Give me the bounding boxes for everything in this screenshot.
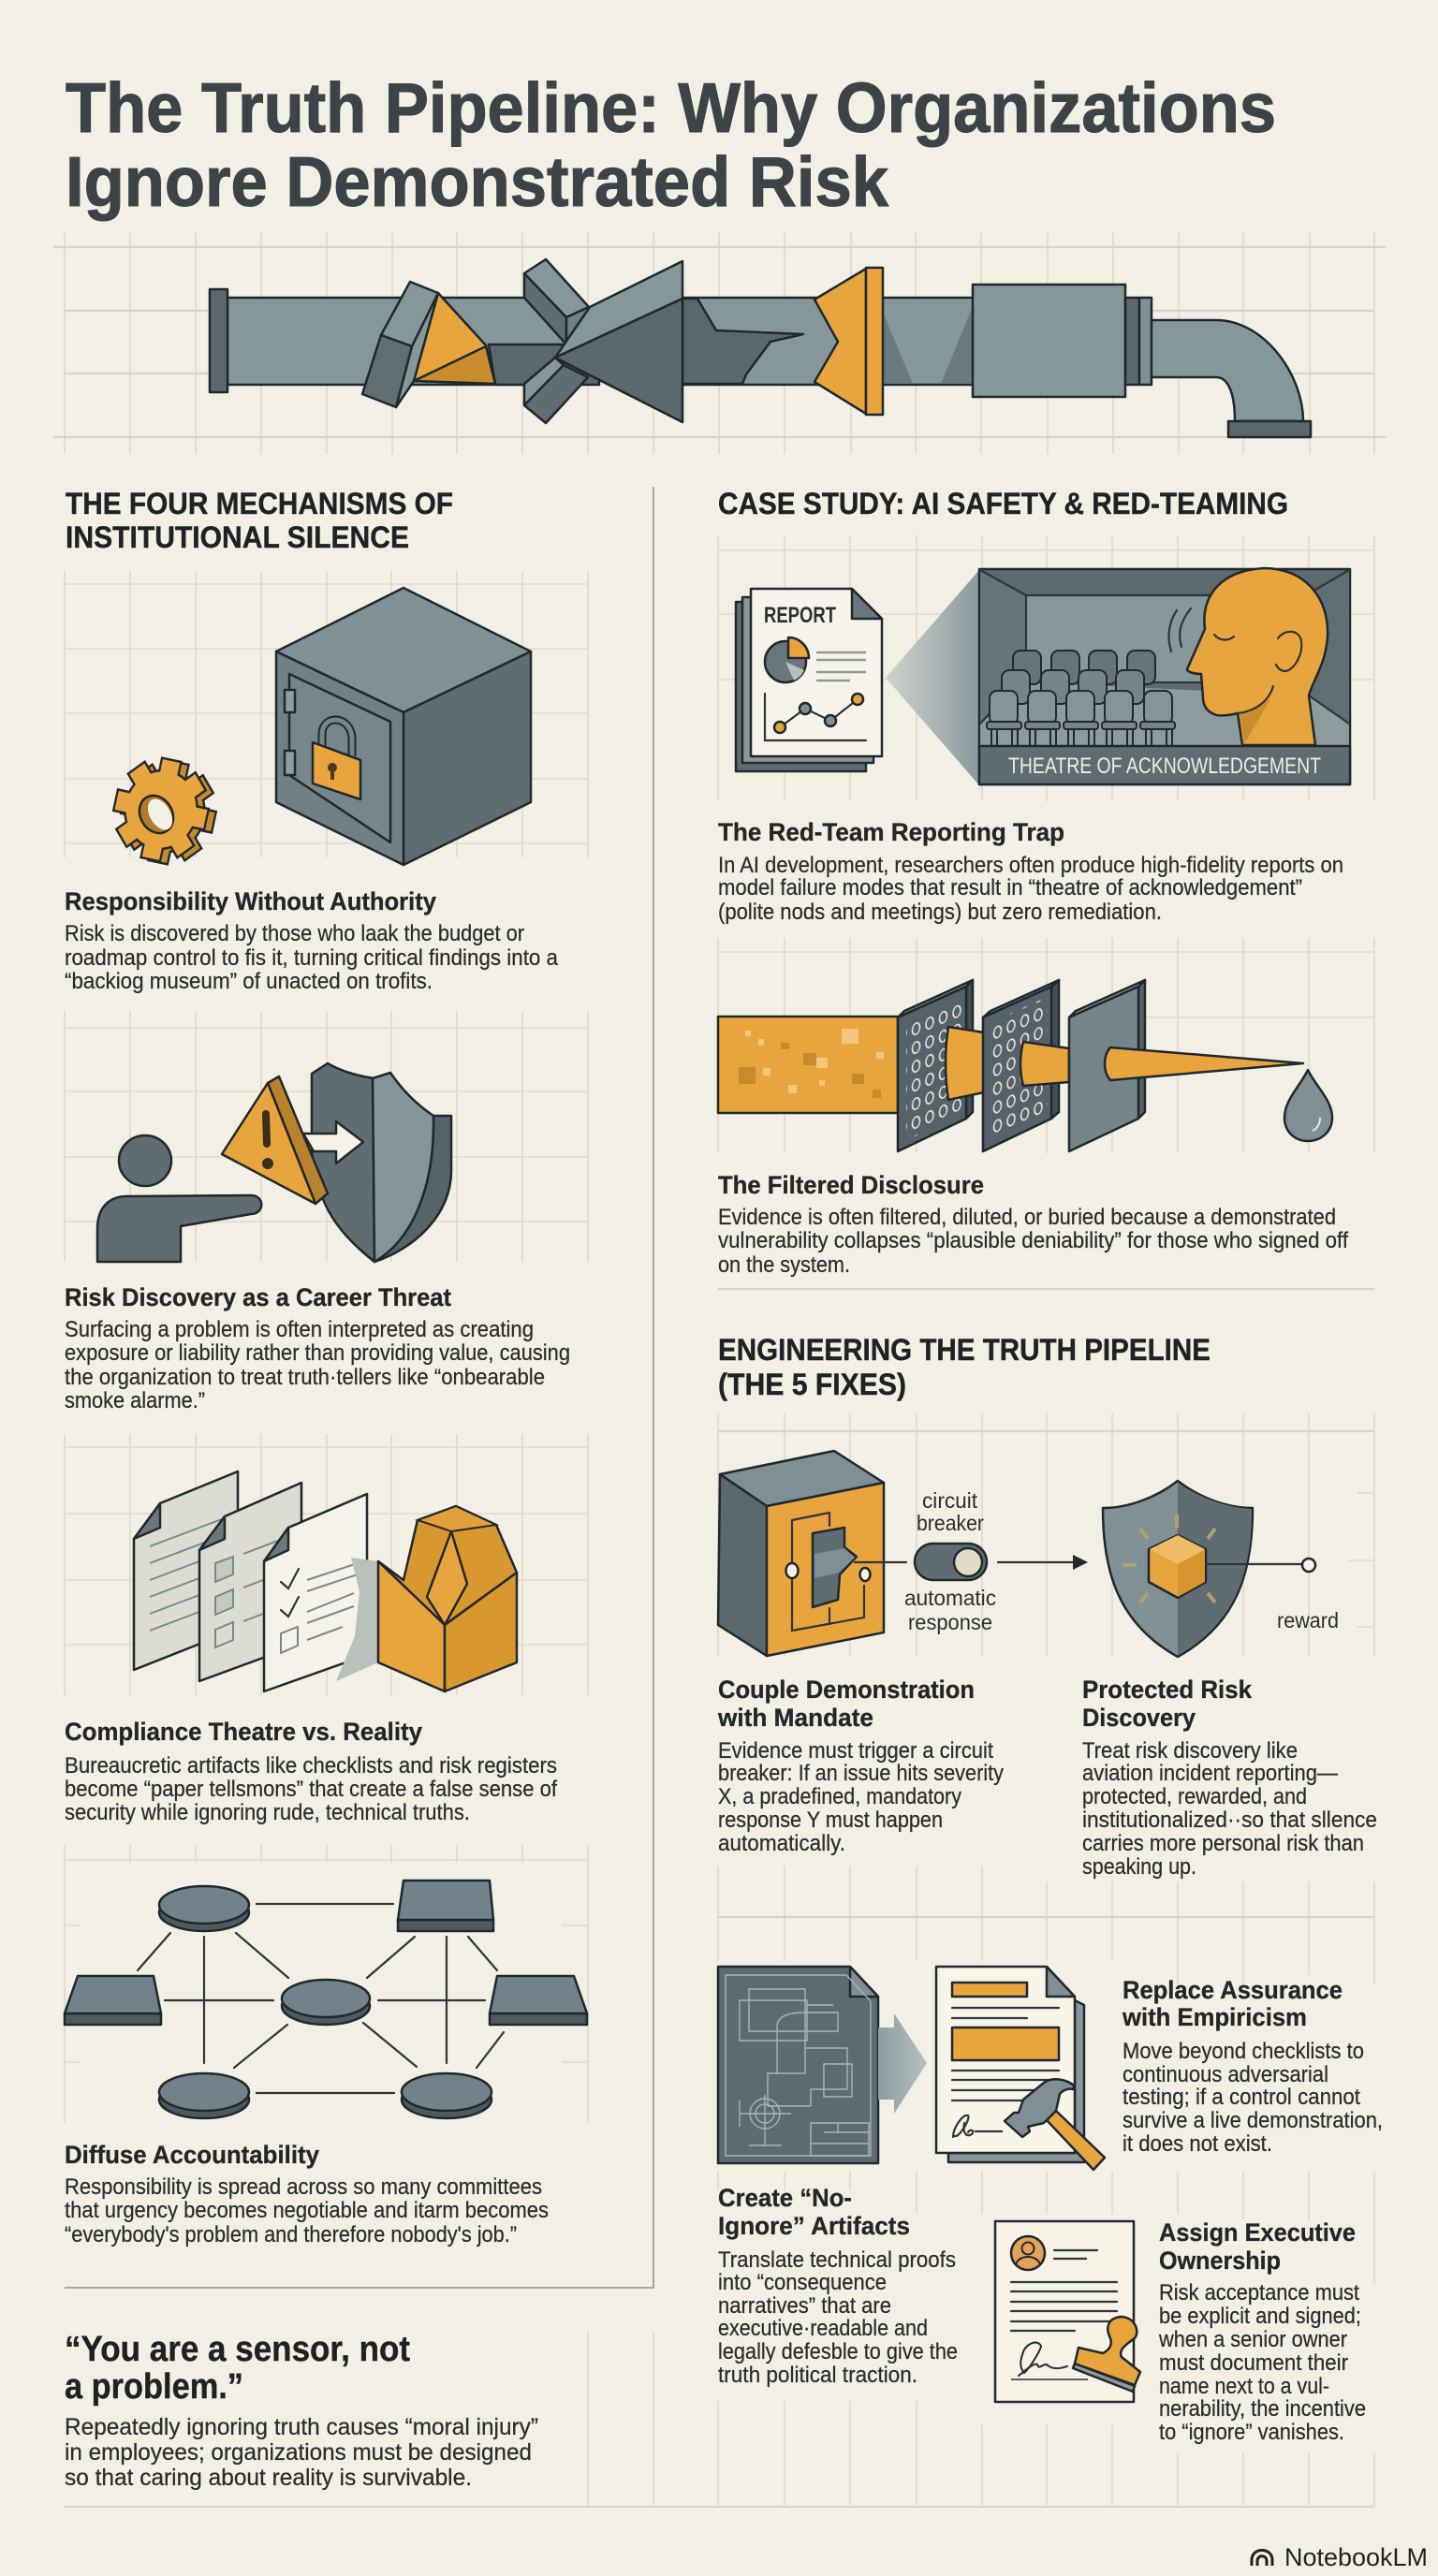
footer: NotebookLM logo	[1252, 2543, 1428, 2571]
pipe break: dark inner section	[489, 344, 599, 385]
icon: locked safe	[276, 588, 531, 865]
icon: report stack	[736, 589, 882, 771]
outlet foot	[1228, 421, 1311, 437]
text: the filtered disclosure: Evidence is often filtered, diluted, or buried because a demonstrated	[718, 1205, 1336, 1230]
rubber stamp	[1073, 2317, 1140, 2392]
pull quote: so that caring about reality is survivable.	[65, 2465, 472, 2491]
text: protected risk discovery: aviation incident reporting—	[1082, 1761, 1338, 1786]
filter: solid panel	[1069, 980, 1145, 1151]
text: diffuse accountability	[65, 2141, 549, 2247]
illustration: broken truth pipeline	[210, 259, 1311, 437]
room frame and ceiling	[979, 569, 1350, 784]
label: automatic response	[904, 1586, 996, 1634]
text lines	[816, 652, 866, 681]
text: compliance theatre vs reality: become “paper tellsmons” that create a false sense of	[65, 1777, 557, 1802]
seats	[987, 651, 1175, 745]
icon: circuit breaker box	[718, 1451, 884, 1656]
text: assign executive ownership	[1158, 2218, 1366, 2445]
text: responsibility without authority: Responsibility Without Authority	[65, 887, 436, 915]
text: create no-ignore artifacts: into “consequence	[718, 2270, 887, 2295]
title	[66, 68, 1276, 221]
text: replace assurance with empiricism: testing; if a control cannot	[1123, 2085, 1360, 2110]
label: circuit breaker: circuit	[922, 1488, 978, 1513]
text: replace assurance with empiricism: it does not exist.	[1123, 2131, 1272, 2157]
node: top left	[159, 1886, 249, 1931]
orange head	[1187, 568, 1328, 745]
floor	[980, 682, 1349, 746]
text: risk discovery as a career threat: the organization to treat truth·tellers like “onbearable	[65, 1365, 545, 1390]
paper: report	[134, 1471, 238, 1670]
orange valve	[814, 268, 883, 415]
text: create no-ignore artifacts: Translate technical proofs	[718, 2247, 956, 2273]
illustration: filtered disclosure	[718, 980, 1332, 1151]
text: assign executive ownership: when a senior owner	[1158, 2327, 1347, 2352]
icon: document with hammer	[936, 1967, 1105, 2170]
icon: signed document with stamp	[995, 2221, 1140, 2402]
pull quote: in employees; organizations must be designed	[65, 2439, 532, 2466]
illustration: theatre of acknowledgement	[979, 568, 1350, 784]
label: circuit breaker: breaker	[917, 1511, 984, 1535]
pipe shard: lower left	[362, 335, 412, 407]
torn shadow	[336, 1558, 378, 1681]
node: right	[490, 1976, 587, 2025]
light rays	[1123, 1515, 1215, 1603]
text: diffuse accountability: Diffuse Accountability	[65, 2141, 319, 2169]
text: risk discovery as a career threat: exposure or liability rather than providing value, causing	[65, 1340, 570, 1366]
text: create no-ignore artifacts: executive·readable and	[718, 2316, 928, 2341]
left wall	[980, 570, 1026, 724]
icon: orange gear	[107, 752, 223, 871]
heading: engineering the truth pipeline	[718, 1333, 1211, 1401]
icon: protected shield with cube	[1103, 1481, 1253, 1657]
safe door	[289, 674, 390, 842]
hammer	[1005, 2079, 1105, 2170]
text: couple demonstration with mandate: X, a pradefined, mandatory	[718, 1784, 961, 1809]
droplet	[1284, 1070, 1332, 1141]
padlock	[313, 720, 360, 799]
shield right edge	[374, 1116, 451, 1262]
heading: four mechanisms	[66, 487, 453, 554]
text: risk discovery as a career threat: Surfacing a problem is often interpreted as creating	[65, 1317, 534, 1342]
text: assign executive ownership: Risk acceptance must	[1159, 2280, 1359, 2305]
text: assign executive ownership: to “ignore” vanishes.	[1159, 2420, 1344, 2445]
safe right side	[404, 651, 531, 865]
connectors	[138, 1904, 504, 2093]
icon: notebooklm arcs	[1252, 2550, 1272, 2566]
column divider	[65, 487, 653, 2288]
shield back	[312, 1063, 374, 1262]
header lines	[1054, 2250, 1097, 2259]
text: couple demonstration with mandate	[717, 1676, 1004, 1856]
heading: engineering the truth pipeline: ENGINEERING THE TRUTH PIPELINE	[718, 1333, 1211, 1367]
label: automatic response: response	[908, 1610, 992, 1634]
text: risk discovery as a career threat: smoke alarme.”	[65, 1388, 205, 1413]
back sheet	[948, 2000, 1084, 2162]
text: replace assurance with empiricism: continuous adversarial	[1123, 2062, 1328, 2087]
text: protected risk discovery: speaking up.	[1082, 1854, 1196, 1880]
front row cushions	[987, 722, 1175, 729]
shield face	[373, 1073, 433, 1262]
text: the filtered disclosure: The Filtered Disclosure	[718, 1171, 984, 1199]
text: the red-team reporting trap: In AI development, researchers often produce high-fidelity reports on	[718, 853, 1343, 878]
pipe segment: left intake	[227, 298, 565, 385]
front page	[751, 589, 882, 756]
avatar	[1011, 2236, 1045, 2270]
text: protected risk discovery: protected, rewarded, and	[1082, 1784, 1307, 1809]
text: replace assurance with empiricism	[1122, 1976, 1383, 2157]
label: reward: reward	[1277, 1608, 1339, 1632]
folded corner	[1047, 1967, 1075, 1997]
pipe crack	[682, 299, 803, 384]
signature	[953, 2115, 1002, 2137]
node: centre	[282, 1980, 370, 2025]
text: compliance theatre vs reality	[65, 1718, 557, 1825]
pipe segment: after the clamp	[682, 298, 974, 385]
cube	[1149, 1535, 1206, 1598]
arrow: blueprint to evidence document	[878, 2013, 927, 2114]
text: the red-team reporting trap: The Red-Team Reporting Trap	[718, 818, 1064, 846]
reward connector	[1206, 1559, 1315, 1572]
switch lever	[813, 1528, 857, 1607]
text: assign executive ownership: be explicit and signed;	[1159, 2304, 1361, 2329]
icon: shield with arrow and warning	[222, 1063, 451, 1262]
text: compliance theatre vs reality: security while ignoring rude, technical truths.	[65, 1800, 470, 1825]
pipe shard: left side strip	[396, 293, 438, 407]
middle row	[1002, 670, 1144, 704]
safe top	[276, 588, 531, 712]
label: automatic response: automatic	[904, 1586, 996, 1610]
text: protected risk discovery: carries more personal risk than	[1082, 1831, 1364, 1856]
blueprint linework	[726, 1975, 871, 2156]
arrow	[303, 1121, 363, 1164]
text: assign executive ownership: name next to a vul-	[1159, 2374, 1329, 2399]
icon: person pointing	[97, 1135, 261, 1262]
banner	[979, 746, 1350, 784]
folded corner	[852, 589, 882, 619]
text: couple demonstration with mandate: response Y must happen	[718, 1808, 943, 1833]
pull quote: “You are a sensor, not	[65, 2330, 410, 2369]
text: compliance theatre vs reality: Bureaucretic artifacts like checklists and risk registers	[65, 1753, 557, 1778]
document lines	[952, 2008, 1059, 2100]
title: The Truth Pipeline: Why Organizations	[66, 68, 1276, 147]
text: assign executive ownership: must document their	[1159, 2350, 1348, 2376]
elbow outlet	[1152, 320, 1303, 421]
text: create no-ignore artifacts	[718, 2184, 958, 2388]
paper: checklist	[264, 1494, 367, 1691]
pipe shard: upper left	[381, 282, 438, 346]
back row	[1013, 651, 1155, 684]
paper: checkbox form	[199, 1483, 301, 1681]
text: responsibility without authority: “backiog museum” of unacted on trofits.	[65, 969, 433, 994]
text: protected risk discovery: institutionalized··so that sllence	[1082, 1808, 1377, 1833]
flow: after first mesh	[946, 1027, 984, 1100]
text: the filtered disclosure: vulnerability collapses “plausible deniability” for those who signed off	[718, 1228, 1348, 1253]
text: the filtered disclosure	[718, 1171, 1348, 1278]
text: create no-ignore artifacts: narratives” that are	[718, 2293, 891, 2319]
title: Ignore Demonstrated Risk	[66, 142, 888, 221]
text: couple demonstration with mandate: automatically.	[718, 1831, 845, 1856]
front row backs	[990, 691, 1172, 724]
text: create no-ignore artifacts: Ignore” Artifacts	[718, 2212, 910, 2240]
pipe shard: upper centre	[524, 259, 604, 344]
text: replace assurance with empiricism: Replace Assurance	[1123, 1976, 1343, 2004]
text: couple demonstration with mandate: Couple Demonstration	[718, 1676, 975, 1704]
evidence block	[718, 1017, 898, 1113]
text: replace assurance with empiricism: with Empiricism	[1122, 2003, 1307, 2031]
arrow: breaker to shield	[998, 1555, 1088, 1570]
heading: four mechanisms: INSTITUTIONAL SILENCE	[66, 520, 409, 554]
right flange	[1125, 298, 1152, 385]
page	[995, 2221, 1134, 2402]
pie chart	[765, 637, 809, 682]
text: diffuse accountability: Responsibility is spread across so many committees	[65, 2174, 542, 2200]
text: the filtered disclosure: on the system.	[718, 1252, 850, 1278]
text: create no-ignore artifacts: truth political traction.	[718, 2363, 917, 2388]
text: compliance theatre vs reality: Compliance Theatre vs. Reality	[65, 1718, 422, 1746]
clamp cone	[555, 261, 682, 422]
pipe break: orange exposed core	[414, 293, 495, 384]
flow: after second mesh	[1020, 1042, 1069, 1086]
signature	[1011, 2343, 1088, 2379]
text: diffuse accountability: “everybody's problem and therefore nobody's job.”	[65, 2222, 517, 2247]
text: responsibility without authority: Risk is discovered by those who laak the budget or	[65, 921, 524, 946]
text: replace assurance with empiricism: survive a live demonstration,	[1123, 2108, 1383, 2133]
text: create no-ignore artifacts: legally defesble to give the	[718, 2339, 958, 2364]
node: top right	[398, 1881, 493, 1931]
text: the red-team reporting trap: model failure modes that result in “theatre of acknowledgement”	[718, 875, 1302, 900]
text: protected risk discovery: Protected Risk	[1082, 1676, 1253, 1704]
report label: REPORT	[764, 603, 836, 628]
terminals	[786, 1563, 871, 1581]
text: couple demonstration with mandate: with Mandate	[717, 1704, 873, 1732]
text: responsibility without authority	[65, 887, 559, 994]
line chart	[765, 694, 866, 740]
safe front	[276, 651, 404, 865]
text: protected risk discovery: Discovery	[1082, 1704, 1196, 1732]
text: responsibility without authority: roadmap control to fis it, turning critical findings into a	[65, 945, 559, 971]
filter: first mesh	[898, 980, 973, 1151]
filter: second mesh	[983, 980, 1059, 1151]
back sheets	[736, 597, 873, 771]
text: create no-ignore artifacts: Create “No-	[718, 2184, 852, 2212]
node: bottom left	[159, 2073, 249, 2118]
pipe flange: left	[210, 289, 227, 392]
pinch shading	[883, 306, 973, 384]
node: bottom right	[402, 2073, 492, 2118]
circuit wiring	[792, 1513, 864, 1631]
node: left	[65, 1976, 161, 2025]
front sheet	[936, 1967, 1075, 2153]
text: risk discovery as a career threat	[65, 1283, 570, 1413]
pipe shard: lower centre	[524, 358, 588, 423]
icon: blueprint sheet	[718, 1967, 878, 2163]
right wall	[1309, 570, 1349, 724]
text: assign executive ownership: Assign Executive	[1159, 2218, 1356, 2247]
text: couple demonstration with mandate: breaker: If an issue hits severity	[718, 1761, 1004, 1786]
orange box	[378, 1506, 517, 1691]
banner label: THEATRE OF ACKNOWLEDGEMENT	[1008, 754, 1321, 779]
heading: case study: CASE STUDY: AI SAFETY & RED-TEAMING	[718, 487, 1288, 520]
back wall	[1026, 595, 1312, 682]
front row legs	[991, 728, 1172, 745]
body lines	[1011, 2282, 1117, 2331]
text: replace assurance with empiricism: Move beyond checklists to	[1123, 2039, 1364, 2064]
projection cone	[886, 570, 979, 785]
flow: final trickle	[1105, 1047, 1303, 1080]
pull quote: a problem.”	[65, 2367, 243, 2407]
text: the red-team reporting trap: (polite nods and meetings) but zero remediation.	[718, 900, 1162, 925]
hinges	[285, 690, 295, 775]
pull quote	[65, 2330, 538, 2491]
icon: stacked compliance papers	[134, 1471, 517, 1691]
text: the red-team reporting trap	[718, 818, 1343, 925]
text: risk discovery as a career threat: Risk Discovery as a Career Threat	[65, 1283, 451, 1311]
warning sign	[222, 1076, 328, 1204]
text: assign executive ownership: nerability, the incentive	[1159, 2396, 1366, 2422]
wordmark: NotebookLM	[1284, 2543, 1428, 2571]
text: protected risk discovery	[1082, 1676, 1377, 1880]
text: assign executive ownership: Ownership	[1159, 2247, 1281, 2275]
text: couple demonstration with mandate: Evidence must trigger a circuit	[718, 1738, 993, 1764]
text: protected risk discovery: Treat risk discovery like	[1082, 1738, 1298, 1764]
pull quote: Repeatedly ignoring truth causes “moral injury”	[65, 2414, 538, 2440]
connector and toggle	[855, 1544, 987, 1580]
sound waves	[1169, 608, 1191, 651]
collar block	[973, 285, 1125, 397]
heading: four mechanisms: THE FOUR MECHANISMS OF	[66, 487, 453, 520]
heading: engineering the truth pipeline: (THE 5 FIXES)	[718, 1368, 906, 1401]
orange blocks	[952, 1983, 1059, 2060]
text: diffuse accountability: that urgency becomes negotiable and itarm becomes	[65, 2198, 549, 2223]
diagram: diffuse accountability network	[65, 1881, 587, 2118]
room edges	[980, 570, 1349, 724]
label: circuit breaker	[917, 1488, 984, 1535]
